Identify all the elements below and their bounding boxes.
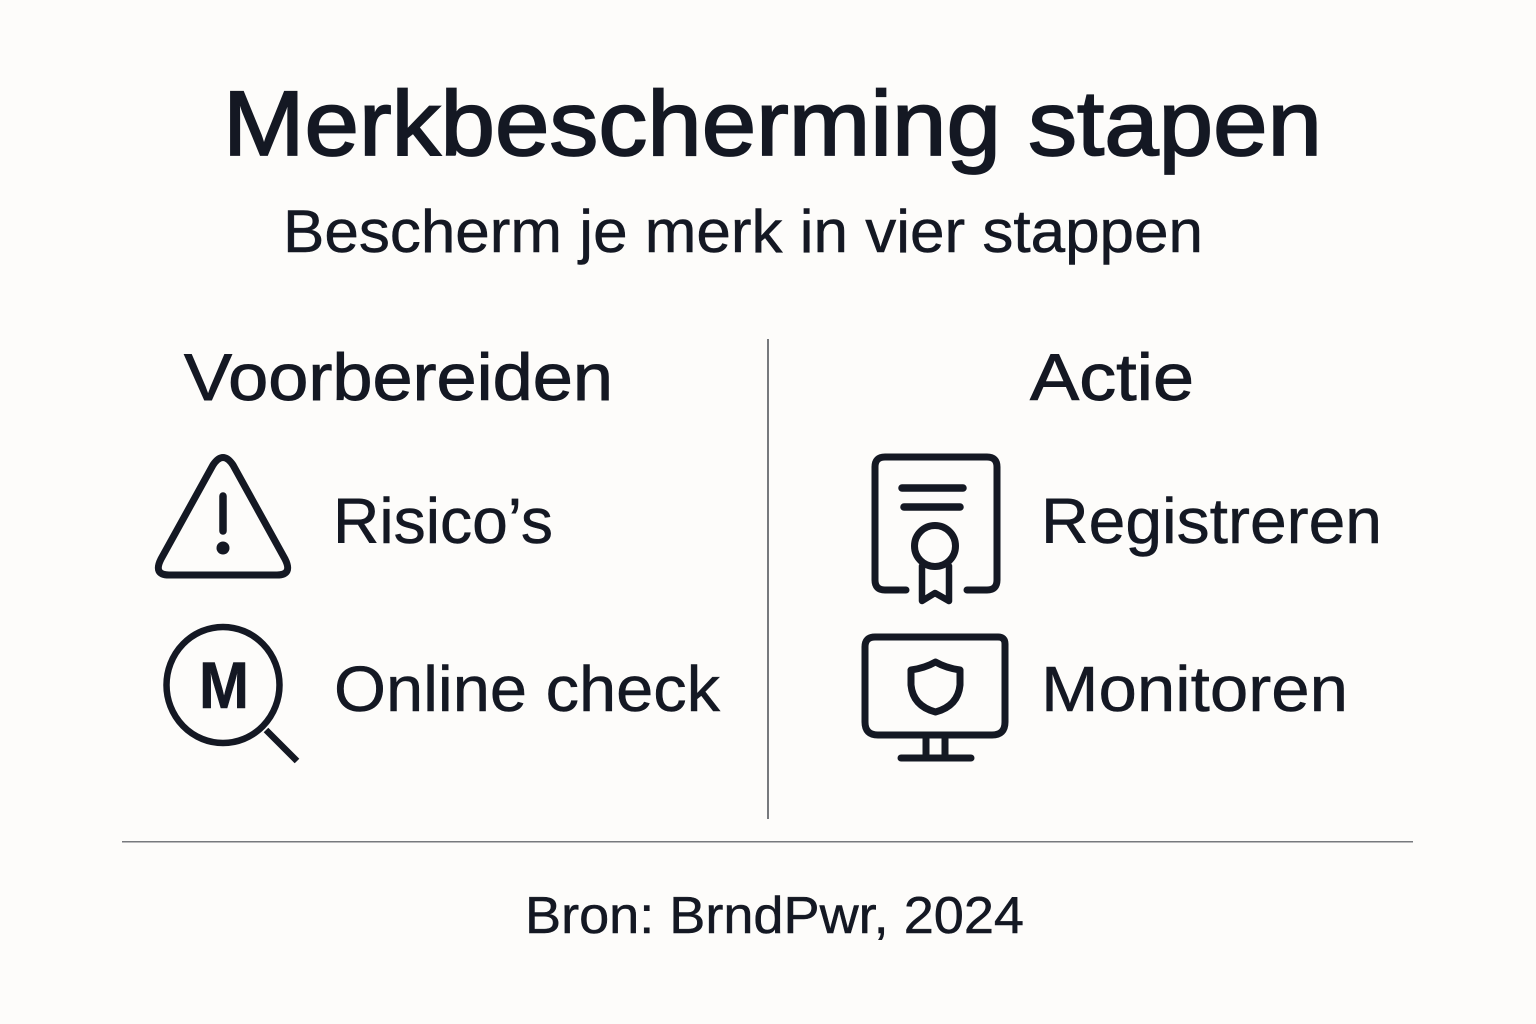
icon: warning triangle xyxy=(158,458,288,575)
icon: monitor with shield xyxy=(865,637,1005,758)
subtitle: Bescherm je merk in vier stappen xyxy=(283,198,1203,265)
label: Registreren: Registreren xyxy=(1041,485,1382,557)
icon: certificate xyxy=(875,457,997,601)
icon: magnifier with M xyxy=(166,627,297,761)
vertical divider xyxy=(767,339,769,819)
horizontal divider xyxy=(122,841,1413,842)
source line: Bron: BrndPwr, 2024 xyxy=(525,887,1024,945)
heading: Actie: Actie xyxy=(1030,340,1194,414)
heading: Voorbereiden: Voorbereiden xyxy=(184,340,613,414)
title: Merkbescherming stapen xyxy=(223,73,1322,175)
icon: magnifier with M: M xyxy=(199,648,249,722)
label: Monitoren: Monitoren xyxy=(1041,653,1348,725)
label: Risico's: Risico’s xyxy=(333,485,553,557)
label: Online check: Online check xyxy=(334,653,721,725)
